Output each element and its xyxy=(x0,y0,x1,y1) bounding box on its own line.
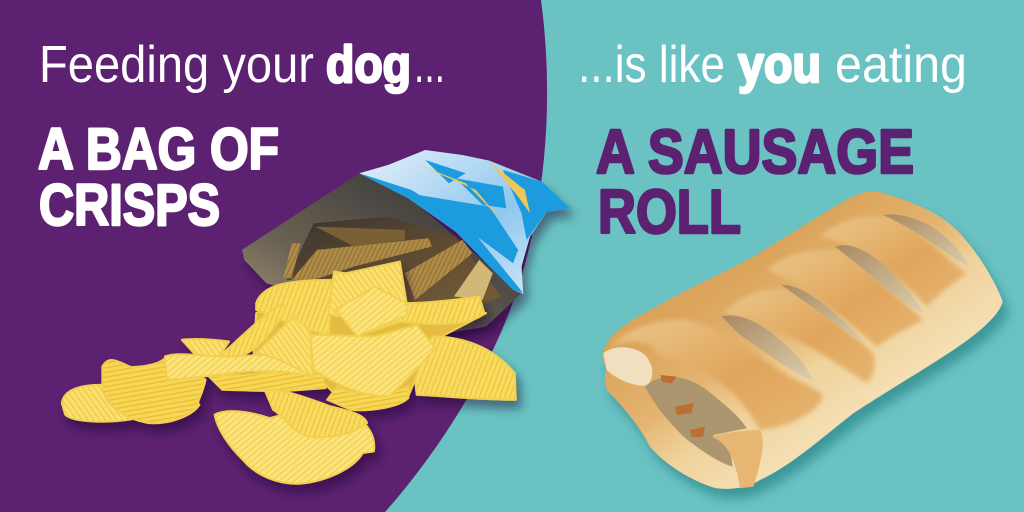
pastry body xyxy=(602,191,1003,489)
crisp pile backing xyxy=(253,280,486,410)
sausage filling xyxy=(645,377,747,467)
left intro line: Feeding your dog...: dog xyxy=(326,36,411,94)
packet blue stripes xyxy=(359,160,571,293)
heading: A BAG OF CRISPS: CRISPS xyxy=(39,173,220,238)
heading: A SAUSAGE ROLL xyxy=(596,118,914,247)
crisp: pile long right xyxy=(361,297,484,335)
right intro line: ...is like you eating: ...is like xyxy=(578,36,725,94)
golden pastry bands xyxy=(610,216,967,430)
crisp: centre large xyxy=(310,325,435,396)
crisp: pile square front xyxy=(336,287,407,336)
crisp: upright sliver xyxy=(219,303,285,356)
crisp: bottom top xyxy=(265,390,367,437)
crisp: upper pile left xyxy=(256,280,332,335)
left intro line: Feeding your dog...: ... xyxy=(414,36,445,94)
heading: A BAG OF CRISPS: A BAG OF xyxy=(38,117,279,182)
crisp: long thin xyxy=(165,353,313,380)
left intro line: Feeding your dog...: Feeding your xyxy=(39,36,314,94)
crisp: right large xyxy=(415,336,516,400)
crisp packet xyxy=(242,150,571,335)
spilled crisps xyxy=(62,262,516,484)
image: sausage roll xyxy=(602,191,1003,489)
packet yellow flash xyxy=(415,162,530,218)
sausage meat bits xyxy=(661,375,705,437)
purple left panel xyxy=(0,0,547,512)
pastry lower flap xyxy=(712,430,763,488)
right intro line: ...is like you eating: eating xyxy=(835,36,967,94)
image: open crisp packet with spilled crisps xyxy=(62,150,571,484)
right intro line: ...is like you eating xyxy=(578,36,967,94)
crisp: left ridged xyxy=(102,356,205,423)
crisp: pile square back xyxy=(329,262,407,316)
right intro line: ...is like you eating: you xyxy=(738,36,821,94)
crisp: far left xyxy=(62,385,133,422)
crisps inside the packet xyxy=(283,217,501,303)
crisp: folded centre xyxy=(256,316,313,377)
heading: A SAUSAGE ROLL: A SAUSAGE xyxy=(596,118,914,187)
crisp: flat back xyxy=(182,339,229,356)
packet foil interior xyxy=(242,173,522,335)
pastry slits xyxy=(722,215,970,381)
packet printed flap xyxy=(359,150,571,294)
pastry flaky end xyxy=(603,347,652,386)
crisp: thin flat xyxy=(209,370,325,391)
heading: A BAG OF CRISPS xyxy=(38,117,279,238)
heading: A SAUSAGE ROLL: ROLL xyxy=(598,178,741,247)
crisp: bottom big xyxy=(215,411,374,484)
crisp: lower centre xyxy=(327,386,408,410)
